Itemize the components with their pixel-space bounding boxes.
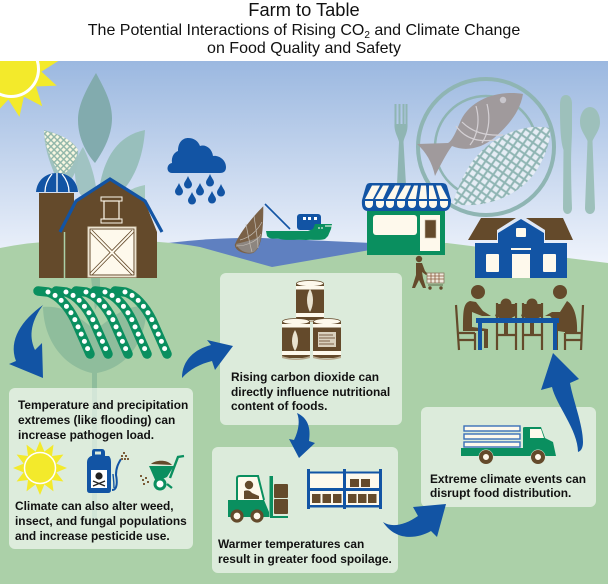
icon: rain cloud — [168, 138, 226, 204]
icon: fork — [394, 104, 408, 185]
text: weeds and pesticide: and increase pesticide use. — [15, 529, 170, 543]
panel: pathogens and pests — [9, 388, 193, 549]
plant background — [43, 73, 147, 523]
title: 2 — [364, 30, 370, 41]
icon: store — [362, 183, 451, 255]
table — [476, 318, 559, 350]
text: carbon dioxide: directly influence nutritional — [231, 385, 390, 399]
plate with fish and corn — [417, 79, 554, 215]
text: weeds and pesticide: Climate can also alter weed, — [15, 499, 174, 513]
icon: knife — [560, 95, 572, 214]
text: pathogen load: increase pathogen load. — [18, 428, 154, 442]
icon: stacked cans — [282, 280, 341, 360]
title: on Food Quality and Safety — [207, 40, 401, 57]
crop rows — [38, 291, 167, 354]
text: spoilage: Warmer temperatures can — [218, 537, 364, 551]
icon: forklift — [228, 476, 288, 521]
text: distribution: Extreme climate events can — [430, 472, 586, 486]
icon: spoon — [580, 107, 600, 214]
icon: storage shelves — [307, 469, 382, 509]
icon: shopper with cart — [412, 256, 444, 290]
arrow: spoilage to distribution — [383, 504, 446, 537]
icon: sun in sky — [0, 61, 58, 117]
fish — [417, 93, 523, 176]
chairs — [456, 303, 583, 350]
green hills — [0, 240, 608, 584]
title: The Potential Interactions of Rising CO — [88, 22, 364, 39]
arrow: pathogens to nutrition — [182, 340, 233, 378]
arrow: nutrition to spoilage — [289, 413, 315, 458]
icon: pesticide sprayer — [87, 449, 129, 493]
people — [463, 285, 577, 350]
panel: food distribution — [421, 407, 596, 507]
title — [88, 0, 520, 57]
icon: sun — [13, 441, 67, 495]
icon: fishing boat and net — [235, 204, 332, 253]
text: distribution: disrupt food distribution. — [430, 486, 571, 500]
icon: wheelbarrow — [140, 456, 184, 489]
text: pathogen load: extremes (like flooding) can — [18, 413, 175, 427]
text: pathogen load: Temperature and precipitation — [18, 398, 188, 412]
arrow: distribution to table — [541, 353, 583, 452]
corn cob on plate — [453, 127, 550, 205]
icon: barn — [60, 179, 162, 278]
arrow: farm to pathogens — [9, 305, 43, 378]
text: carbon dioxide: content of foods. — [231, 399, 327, 413]
icon: family at table — [456, 285, 583, 350]
sky background — [0, 61, 608, 266]
icon: truck — [461, 426, 556, 464]
icon: house — [468, 218, 573, 278]
text: spoilage: result in greater food spoilage. — [218, 552, 392, 566]
title: and Climate Change — [370, 22, 520, 39]
text: weeds and pesticide: insect, and fungal populations — [15, 514, 187, 528]
panel: food spoilage — [212, 447, 398, 573]
panel: nutritional content — [220, 273, 402, 425]
icon: corn cob above silo — [44, 131, 78, 174]
icon: silo — [36, 173, 78, 278]
water — [168, 238, 372, 270]
text: carbon dioxide: Rising carbon dioxide can — [231, 370, 379, 384]
